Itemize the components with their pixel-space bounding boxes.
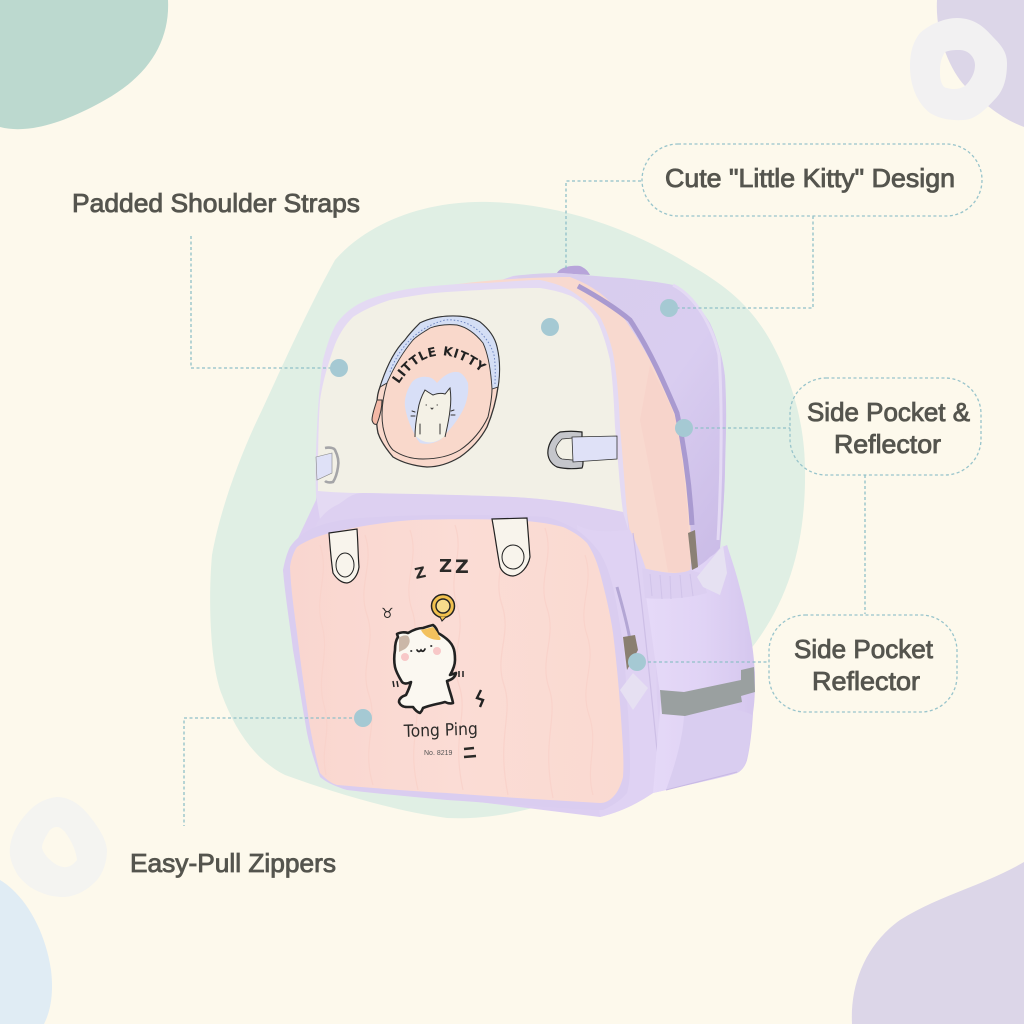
model text: No. 8219 [424, 750, 453, 757]
bolt [477, 690, 483, 707]
back panel edge highlight [673, 285, 721, 540]
D-ring left [316, 448, 338, 482]
tab left [329, 529, 359, 583]
sleep letters: Z [439, 556, 452, 577]
base silhouette [283, 276, 755, 817]
ring: bottom-left [10, 797, 107, 897]
heart bottom fill [416, 430, 445, 442]
kitten [415, 388, 451, 437]
top handle [557, 266, 590, 275]
label: Side Pocket Reflector: Side Pocket [794, 634, 934, 664]
panel wave stripes [320, 525, 593, 798]
side pocket [642, 530, 755, 793]
cat cheek left [401, 653, 409, 661]
sleep letters: Z [455, 556, 469, 578]
label: Side Pocket & Reflector: Side Pocket & [807, 397, 970, 427]
inner ring [382, 383, 492, 459]
pink gusset [413, 277, 691, 575]
label: Side Pocket Reflector [628, 475, 957, 712]
back panel lavender [513, 273, 726, 575]
brand text: Tong Ping [403, 719, 478, 742]
cat patch tan [399, 635, 410, 652]
zipper strip [578, 286, 692, 525]
small mark: ♉ [381, 606, 394, 622]
zipper pull [372, 400, 382, 424]
side strip seam [633, 533, 658, 783]
upper zipper pull [688, 530, 698, 570]
ring: top-right [910, 18, 1007, 120]
cat body [394, 625, 456, 713]
corner blob: bottom-right lavender [852, 862, 1024, 1024]
elastic gather [642, 568, 707, 599]
cat face [411, 646, 432, 652]
corner blob: top-right lavender [937, 0, 1024, 127]
D-ring right [548, 431, 617, 469]
backpack [283, 266, 755, 817]
equals mark [464, 748, 476, 757]
tab left eyelet [336, 553, 354, 577]
lower band lavender [300, 493, 650, 640]
sleep letters: Z [413, 563, 428, 583]
heart [405, 372, 468, 444]
label: Padded Shoulder Straps: Padded Shoulder Straps [72, 188, 360, 218]
corner blob: top-left green [0, 0, 168, 129]
badge text: LITTLE KITTY [392, 346, 487, 384]
logo: Little Kitty badge [372, 315, 500, 468]
tab right eyelet [502, 545, 524, 569]
pocket body [642, 545, 755, 793]
zipper stitches [390, 320, 495, 385]
cat patch orange [421, 627, 441, 640]
label: Easy-Pull Zippers [130, 709, 372, 878]
label: Cute Little Kitty Design: Cute "Little Kitty" Design [665, 163, 955, 193]
label: Cute Little Kitty Design [541, 144, 982, 336]
sleep letters [413, 556, 469, 583]
cat cheek right [433, 647, 441, 655]
label: Side Pocket & Reflector: Reflector [834, 429, 941, 459]
green backdrop blob [210, 202, 805, 818]
pink gusset fold [640, 365, 690, 574]
cat motion marks [393, 671, 463, 687]
cat [393, 625, 463, 713]
pocket crease line [666, 772, 737, 790]
label: Side Pocket Reflector: Reflector [812, 666, 920, 696]
pocket fold shade [666, 709, 752, 790]
gather lines [650, 574, 693, 599]
zipper band [380, 316, 499, 389]
badge base [376, 316, 499, 467]
corner blob: bottom-left blue [0, 880, 52, 1024]
kitten face [411, 405, 455, 434]
pocket charm [697, 545, 727, 595]
bubble icon [432, 594, 454, 621]
front upper trim [316, 280, 630, 545]
lower pink panel [290, 519, 623, 803]
label: Padded Shoulder Straps [72, 188, 360, 377]
lower pocket trim [283, 515, 630, 810]
label: Side Pocket & Reflector [675, 378, 981, 475]
reflector [660, 667, 755, 716]
front zipper pull [620, 635, 648, 710]
front upper cream panel [318, 288, 623, 512]
label: Easy-Pull Zippers: Easy-Pull Zippers [130, 848, 336, 878]
lower pocket zipper [617, 587, 630, 640]
tab right [492, 518, 530, 576]
lower side strip [577, 525, 663, 817]
